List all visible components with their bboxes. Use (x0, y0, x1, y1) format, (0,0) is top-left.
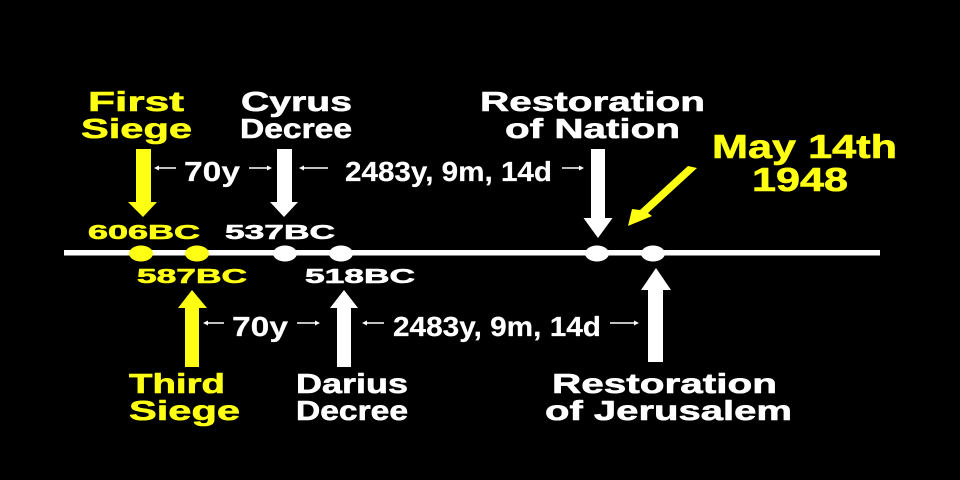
date: 518BC: 518BC (305, 266, 415, 288)
span upper: 2483y, 9m, 14d: 2483y, 9m, 14d (345, 156, 552, 187)
arrow: Darius Decree up (330, 290, 358, 367)
arrow: Cyrus Decree down (270, 149, 298, 217)
heading: Restoration of Jerusalem (545, 368, 792, 426)
arrow: Restoration of Jerusalem up (641, 268, 671, 362)
marker: 587BC (185, 246, 209, 262)
timeline (64, 246, 880, 262)
heading: Darius Decree (296, 368, 408, 426)
date: 606BC: 606BC (88, 222, 200, 244)
heading: Darius Decree: Decree (296, 395, 408, 426)
span lower: 70y (203, 311, 320, 342)
span lower: 2483y, 9m, 14d: 2483y, 9m, 14d (393, 311, 601, 342)
heading: Third Siege: Siege (129, 395, 240, 426)
span upper: 2483y, 9m, 14d (299, 156, 584, 187)
arrow: Restoration of Nation down (584, 149, 612, 238)
heading: First Siege: Siege (81, 113, 192, 144)
heading: Restoration of Jerusalem: of Jerusalem (545, 395, 792, 426)
heading: Restoration of Nation (480, 86, 705, 144)
marker: 537BC (273, 246, 297, 262)
heading: First Siege (81, 86, 192, 144)
heading: Restoration of Nation: Restoration (480, 86, 705, 117)
marker: restoration of nation (585, 246, 609, 262)
heading: Third Siege: Third (129, 368, 225, 399)
marker: 518BC (329, 246, 353, 262)
arrow: May 14th pointer (628, 166, 697, 226)
arrow: First Siege down (128, 149, 157, 217)
callout: May 14th 1948: 1948 (752, 161, 848, 198)
heading: Third Siege (129, 368, 240, 426)
timeline bar (64, 250, 880, 256)
heading: Cyrus Decree: Decree (240, 113, 352, 144)
heading: Cyrus Decree: Cyrus (241, 86, 352, 117)
heading: Darius Decree: Darius (296, 368, 408, 399)
date: 537BC: 537BC (225, 222, 335, 244)
arrow: Third Siege up (178, 290, 207, 367)
date: 587BC: 587BC (137, 266, 247, 288)
marker: 606BC (129, 246, 153, 262)
span upper: 70y (154, 156, 272, 187)
heading: Restoration of Nation: of Nation (505, 113, 680, 144)
span upper: 70y: 70y (184, 156, 241, 187)
callout: May 14th 1948: May 14th (712, 128, 897, 165)
heading: First Siege: First (88, 86, 184, 117)
span lower: 70y: 70y (232, 311, 289, 342)
heading: Cyrus Decree (240, 86, 352, 144)
heading: Restoration of Jerusalem: Restoration (552, 368, 777, 399)
callout: May 14th 1948 (712, 128, 897, 198)
marker: restoration of Jerusalem (641, 246, 665, 262)
